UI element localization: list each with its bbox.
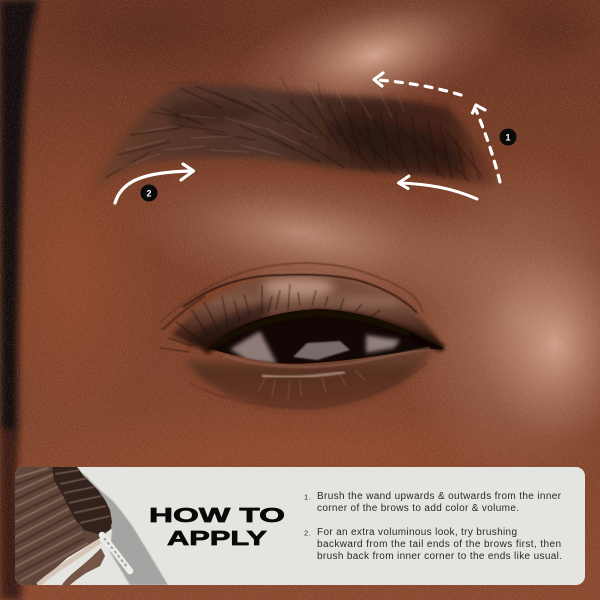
instructions list: For an extra voluminous look, try brushing — [317, 527, 517, 538]
swatch — [15, 467, 112, 585]
step badge 2: 2 — [146, 188, 152, 198]
wand shadow — [82, 472, 168, 585]
brush bristles — [52, 467, 112, 534]
step badge 1: 1 — [505, 132, 511, 142]
eyebrow — [90, 76, 497, 197]
under-eye bag — [185, 348, 436, 409]
arrow 1: dashed upward — [472, 105, 500, 182]
iris reflection — [293, 341, 350, 360]
eye — [160, 263, 444, 409]
instructions list: Brush the wand upwards & outwards from the inner — [317, 491, 562, 502]
eye opening — [207, 309, 443, 364]
lash shadow cloud — [185, 303, 270, 345]
upper lash band — [205, 313, 443, 351]
arrow 2: curved tail arrow — [115, 164, 194, 203]
heading: HOW TO — [149, 504, 285, 527]
stray hairs above brow — [155, 76, 452, 118]
product photo: mascara swatch and wand — [15, 467, 168, 585]
sclera left — [230, 331, 277, 364]
instructions list: 1. — [304, 492, 311, 502]
step badge 1 — [500, 128, 516, 146]
instructions list: 2. — [304, 528, 311, 538]
brow hairs light — [120, 82, 404, 168]
heading — [149, 504, 285, 550]
crumbled clump — [62, 548, 105, 585]
upper crease — [160, 263, 423, 322]
instructions list: brush back from inner corner to the ends like usual. — [317, 551, 562, 562]
instructions list: corner of the brows to add color & volume. — [317, 503, 519, 514]
step badge 2 — [140, 184, 158, 202]
lower lid highlight — [262, 372, 345, 377]
arrow 1: dashed across brow — [374, 73, 461, 95]
heading: APPLY — [167, 527, 267, 550]
hair at left edge — [0, 0, 38, 600]
lower lash line — [225, 348, 430, 367]
lashes — [160, 284, 380, 352]
arrow 1: solid return — [398, 176, 477, 199]
instructions list: backward from the tail ends of the brows first, then — [317, 539, 561, 550]
eyelid — [172, 274, 443, 350]
brow hairs dark — [105, 86, 482, 182]
panel: how to apply — [15, 467, 585, 585]
light edge of swatch — [38, 541, 100, 585]
instructions list — [304, 491, 562, 562]
sclera right — [366, 335, 400, 353]
wand stem — [102, 535, 130, 571]
